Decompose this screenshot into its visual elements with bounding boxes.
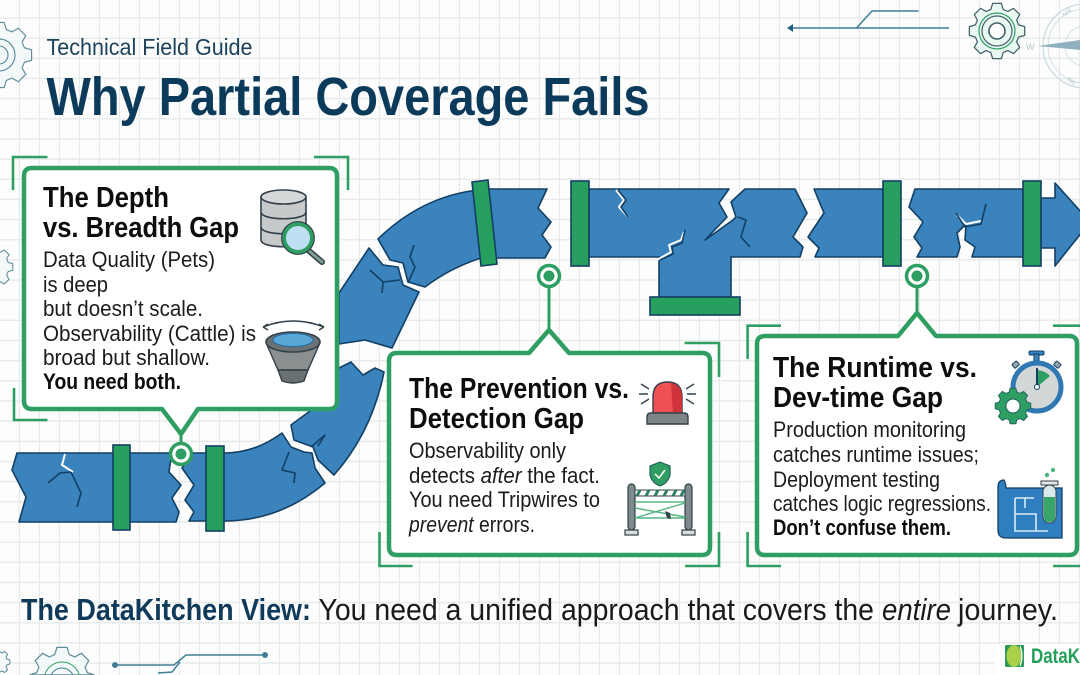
- decorative circuit line: bottom: [112, 652, 268, 673]
- body text: detects after the fact.: [409, 463, 600, 488]
- decorative compass: top right: NW: [1062, 8, 1074, 19]
- body text: catches runtime issues;: [773, 442, 979, 467]
- statement end: journey.: [957, 592, 1058, 627]
- decorative gears: bottom left: [0, 647, 95, 675]
- T base flange: [650, 297, 740, 315]
- main title: Why Partial Coverage Fails: [46, 67, 650, 127]
- body text: prevent errors.: [408, 512, 535, 537]
- pipe segment 7: [808, 189, 883, 257]
- body text: Data Quality (Pets): [43, 247, 215, 272]
- decorative gear: top right: [969, 3, 1025, 59]
- connector node: [170, 434, 192, 464]
- emphasized word: entire: [882, 592, 951, 627]
- decorative compass: top right: W: [1026, 42, 1035, 52]
- pipe segment 1: [12, 453, 181, 522]
- broken pipeline: [12, 180, 1080, 531]
- heading: [43, 182, 239, 244]
- statement: You need a unified approach that covers the: [318, 592, 874, 627]
- flange 1: [113, 445, 130, 530]
- body text: [43, 247, 256, 394]
- panel: runtime vs dev-time gap: [748, 266, 1080, 566]
- body text: Observability only: [409, 438, 566, 463]
- flange 6: [1023, 181, 1041, 266]
- bold lead-in: The DataKitchen View:: [21, 592, 311, 627]
- conclusion line: [21, 592, 1058, 627]
- panel: depth vs breadth gap: [13, 157, 348, 464]
- heading: The Prevention vs.: [409, 373, 629, 405]
- icon: wide lens with arrow: [263, 321, 324, 383]
- panel: prevention vs detection gap: [380, 266, 719, 566]
- body text: broad but shallow.: [43, 345, 210, 370]
- body text: Production monitoring: [773, 417, 966, 442]
- body text: [408, 438, 600, 537]
- flange 5: [883, 181, 901, 266]
- arrow head: [1041, 183, 1080, 266]
- pipe segment 3: [291, 362, 384, 475]
- subtitle: Technical Field Guide: [46, 34, 252, 60]
- pipe segment 2: [182, 433, 325, 521]
- body text: Deployment testing: [773, 467, 940, 492]
- heading: [773, 352, 977, 414]
- callout box: [757, 313, 1077, 555]
- connector node: [538, 266, 560, 330]
- corner brackets: [13, 157, 348, 420]
- decorative circuit line: top right: [787, 11, 949, 32]
- heading: Dev-time Gap: [773, 382, 943, 414]
- pipe segment 8: [909, 189, 1023, 257]
- decorative compass: top right: SW: [1065, 77, 1076, 87]
- body text: [773, 417, 991, 540]
- decorative gear: mid left: [0, 246, 13, 288]
- heading: The Depth: [43, 182, 169, 214]
- body text: You need Tripwires to: [409, 487, 600, 512]
- corner brackets: [380, 343, 719, 566]
- icon: blueprint with test tube: [998, 468, 1062, 538]
- body text: Observability (Cattle) is: [43, 321, 256, 346]
- body text: You need both.: [43, 369, 181, 394]
- decorative gear: top left: [0, 22, 32, 88]
- corner brackets: [748, 326, 1080, 566]
- icon: database with magnifier: [261, 190, 322, 262]
- pipe segment 5: [378, 189, 551, 287]
- body text: but doesn’t scale.: [43, 296, 203, 321]
- pipe segment 4: [339, 248, 419, 348]
- flange 4: [571, 181, 589, 266]
- heading: vs. Breadth Gap: [43, 212, 239, 244]
- logo mark: [1005, 645, 1024, 667]
- icon: tripwire barrier with shield: [625, 462, 695, 535]
- body text: is deep: [43, 272, 108, 297]
- callout box: [24, 168, 337, 434]
- flange 2: [206, 446, 224, 531]
- icon: red alarm: [639, 382, 696, 424]
- T-junction pipe segment: [589, 189, 807, 297]
- heading: Detection Gap: [409, 403, 584, 435]
- logo: [995, 645, 1080, 675]
- title block: [46, 34, 650, 127]
- decorative compass: top right: [1026, 4, 1080, 88]
- heading: The Runtime vs.: [773, 352, 977, 384]
- body text: Don’t confuse them.: [773, 515, 951, 540]
- heading: [409, 373, 629, 435]
- connector node: [906, 266, 928, 313]
- body text: catches logic regressions.: [773, 491, 991, 516]
- icon: stopwatch with gear: [995, 351, 1061, 424]
- callout box: [389, 330, 710, 555]
- flange 3: [472, 180, 497, 266]
